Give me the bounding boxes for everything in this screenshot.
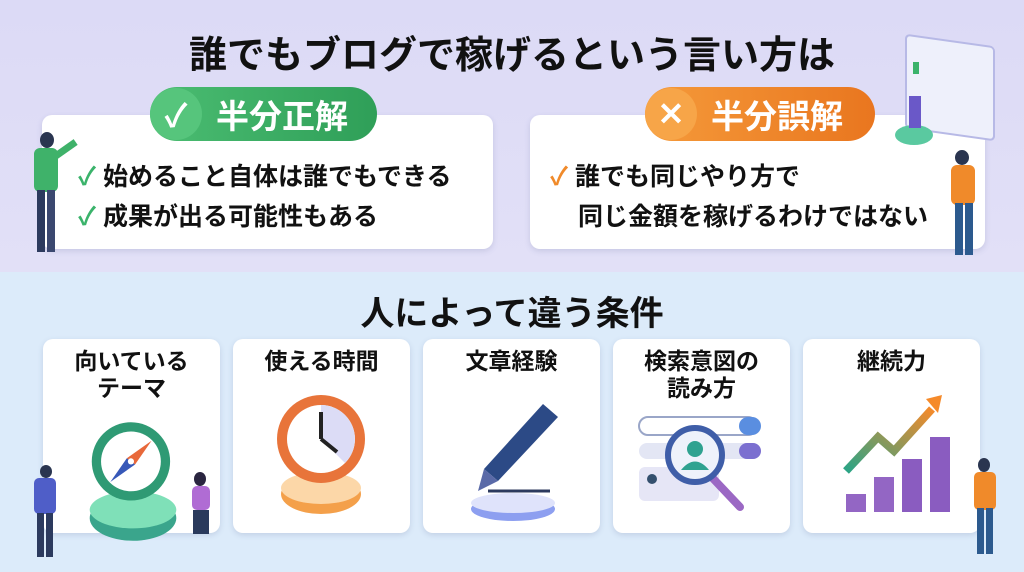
- person: man pointing at chart: [974, 458, 996, 554]
- illustration: browser with person top right: [895, 34, 995, 255]
- correct points: ✓ 成果が出る可能性もある: [78, 203, 378, 231]
- badge: half wrong: ✕: [658, 96, 684, 132]
- person: man with laptop: [34, 465, 56, 557]
- wrong points: [550, 163, 928, 231]
- badge: half wrong: [645, 87, 875, 141]
- person: pointing man left: [34, 132, 78, 252]
- correct points: ✓ 始めること自体は誰でもできる: [78, 163, 452, 191]
- card: persistence: 継続力: [857, 348, 926, 374]
- person: woman: [192, 472, 210, 534]
- icon: growth chart: [843, 395, 950, 512]
- badge: half correct: ✓: [164, 98, 188, 134]
- card: writing: [423, 339, 600, 533]
- card: theme: [43, 339, 220, 533]
- title: 誰でもブログで稼げるという言い方は: [189, 35, 835, 77]
- card: theme: テーマ: [97, 375, 166, 401]
- icon: search: [638, 416, 761, 511]
- badge: half correct: [150, 87, 377, 141]
- icon: clock: [277, 395, 365, 514]
- panel: half wrong: [530, 115, 985, 249]
- section heading: 人によって違う条件: [360, 295, 664, 333]
- card: search intent: [613, 339, 790, 533]
- correct points: [78, 163, 452, 231]
- panel: half correct: [42, 115, 493, 249]
- badge: half wrong: 半分誤解: [711, 98, 843, 135]
- wrong points: 同じ金額を稼げるわけではない: [578, 203, 928, 231]
- icon: compass: [90, 422, 176, 541]
- badge: half correct: 半分正解: [216, 98, 348, 135]
- card: time: 使える時間: [264, 348, 379, 374]
- card: search intent: 検索意図の: [644, 348, 759, 374]
- icon: pen: [471, 404, 558, 521]
- card: search intent: 読み方: [667, 375, 736, 401]
- wrong points: ✓ 誰でも同じやり方で: [550, 163, 800, 191]
- card: theme: 向いている: [74, 348, 189, 374]
- card: persistence: [803, 339, 980, 533]
- card: time: [233, 339, 410, 533]
- card: writing: 文章経験: [466, 348, 558, 374]
